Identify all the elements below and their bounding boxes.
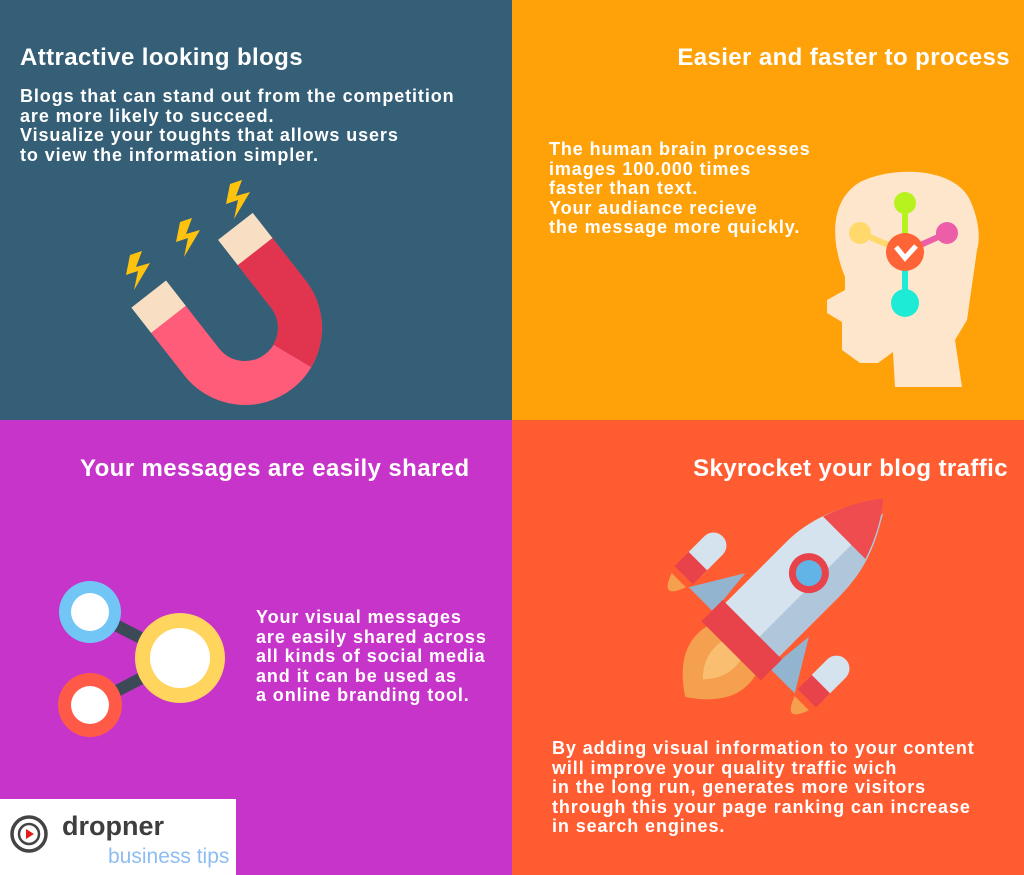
text: visual messages shared: and it can be used as (256, 666, 457, 686)
text: brain processes: the message more quickly. (549, 217, 800, 237)
text: visual information traffic: in search engines. (552, 816, 725, 836)
text: brain processes: images 100.000 times (549, 158, 751, 178)
text: brain processes (549, 139, 811, 237)
logo: dropner business tips (0, 799, 236, 875)
heading: easier and faster to process: Easier and faster to process (677, 44, 1010, 71)
text: attractive blogs: are more likely to succeed. (20, 106, 274, 126)
text: attractive blogs: Visualize your toughts that allows users (20, 125, 399, 145)
text: attractive blogs (20, 86, 455, 165)
icon: head with network (827, 172, 979, 387)
text: visual information traffic: through this your page ranking can increase (552, 796, 971, 816)
icon: play logo (10, 815, 48, 853)
heading: skyrocket your blog traffic: Skyrocket your blog traffic (693, 455, 1008, 482)
logo: dropner business tips: business tips (108, 845, 229, 868)
text: attractive blogs: Blogs that can stand out from the competition (20, 86, 455, 106)
icon: share network (58, 581, 225, 737)
heading: attractive looking blogs: Attractive looking blogs (20, 44, 303, 71)
panel: easily shared (0, 420, 512, 875)
text: visual messages shared: a online branding tool. (256, 685, 470, 705)
text: visual messages shared: Your visual messages (256, 607, 462, 627)
text: brain processes: faster than text. (549, 178, 698, 198)
panel: skyrocket traffic (512, 420, 1024, 875)
icon: magnet (126, 180, 322, 405)
text: visual information traffic (552, 738, 975, 836)
text: brain processes: The human brain processes (549, 139, 811, 159)
text: brain processes: Your audiance recieve (549, 198, 758, 218)
text: visual information traffic: will improve your quality traffic wich (552, 758, 897, 778)
text: attractive blogs: to view the information simpler. (20, 144, 319, 164)
panel: attractive blogs (0, 0, 512, 420)
text: visual information traffic: in the long run, generates more visitors (552, 777, 926, 797)
icon: rocket (668, 498, 884, 714)
text: visual messages shared: all kinds of social media (256, 646, 486, 666)
text: visual messages shared (256, 607, 487, 705)
text: visual information traffic: By adding visual information to your content (552, 738, 975, 758)
logo: dropner business tips: dropner (62, 811, 164, 841)
panel: easier and faster (512, 0, 1024, 420)
heading: your messages are easily shared: Your messages are easily shared (80, 455, 470, 482)
text: visual messages shared: are easily shared across (256, 626, 487, 646)
